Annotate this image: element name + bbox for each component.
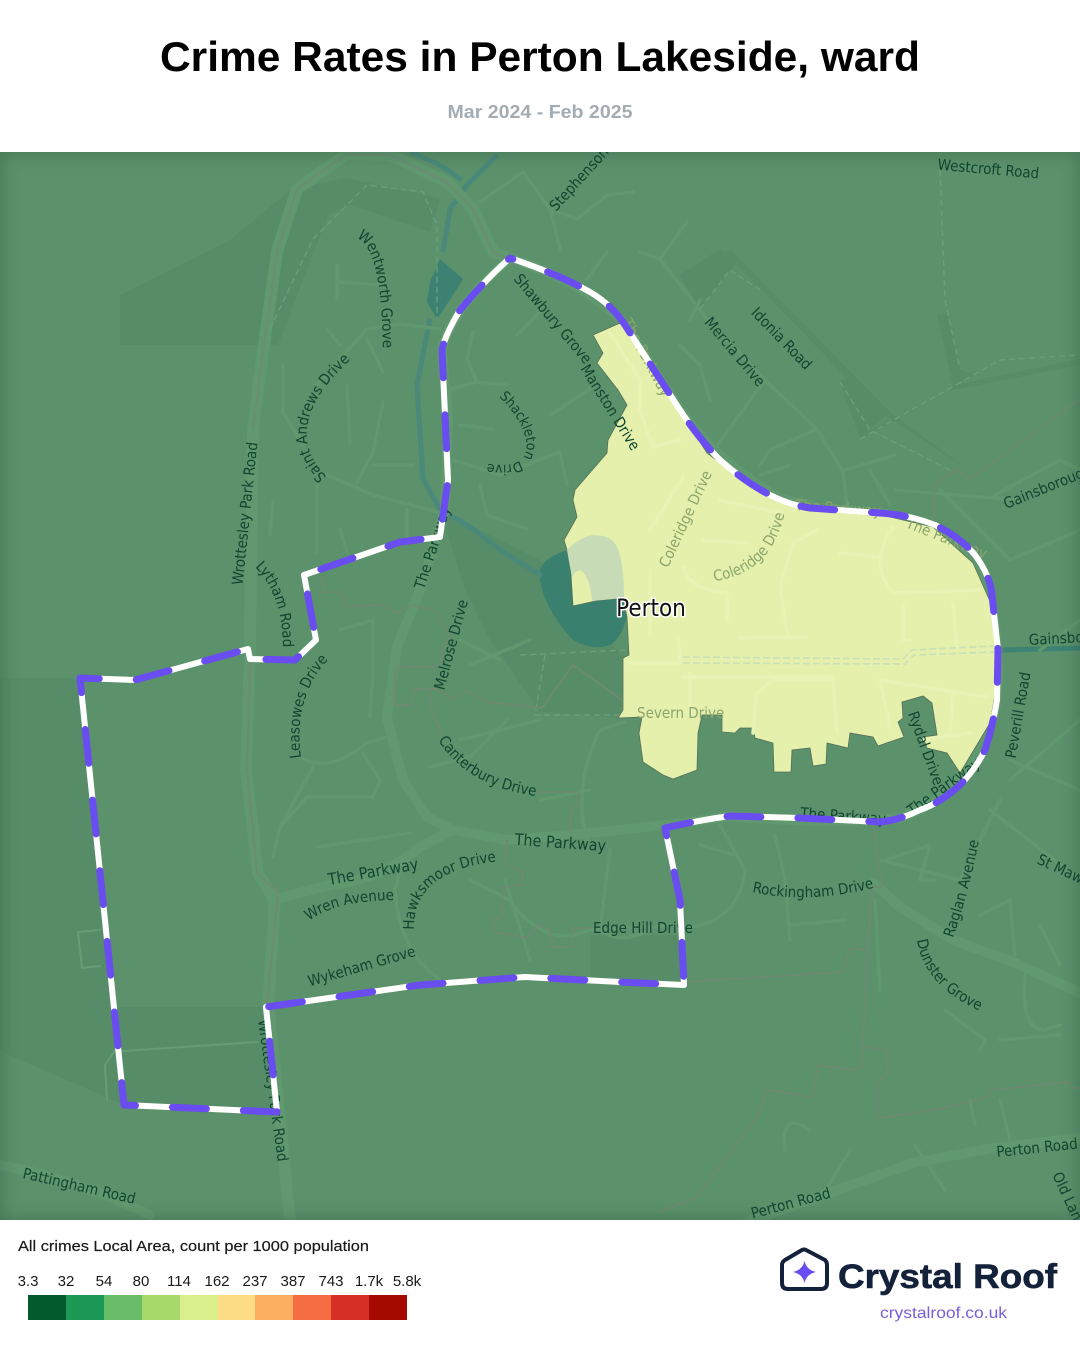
street labels: Perton Road [996,1135,1079,1161]
street labels: Wrottesley Park Road [229,441,261,586]
footpath dashed lines [683,646,995,664]
legend scale values: 162 [204,1273,230,1290]
local boundary lines [247,154,1080,1212]
street labels: The Parkway [618,315,675,400]
map background [0,152,1080,1220]
boundary: Perton Lakeside ward outline [80,258,998,1112]
place label: Perton: Perton [616,594,686,622]
street labels: Wentworth Grove [359,228,393,348]
legend scale values: 237 [242,1273,268,1290]
legend scale values: 54 [96,1273,112,1290]
legend scale values: 1.7k [355,1273,384,1290]
street labels: The Parkway [794,496,882,520]
legend scale values: 3.3 [18,1273,38,1290]
legend scale values: 114 [167,1273,191,1290]
street labels: Edge Hill Drive [593,919,693,937]
legend scale values: 5.8k [393,1273,422,1290]
legend colour ramp [28,1295,407,1320]
street labels: Coleridge Drive [655,468,716,570]
street labels: Pattingham Road [21,1164,137,1208]
street labels: Wykeham Grove [306,942,418,990]
street labels: Lytham Road [256,560,294,646]
roads [77,185,1048,1108]
street labels: Rydal Drive [904,709,947,788]
website url: crystalroof.co.uk [880,1305,1008,1322]
street labels: Westcroft Road [937,156,1040,182]
street labels: Wren Avenue [303,892,394,919]
street labels: Dunster Grove [917,939,981,1010]
street labels: Hawksmoor Drive [402,853,496,928]
street labels: The Parkway [903,514,990,563]
subtitle: date range: Mar 2024 - Feb 2025 [448,102,632,122]
legend scale values [18,1273,422,1290]
street labels: Shackleton Drive [488,391,536,476]
legend scale values: 80 [133,1273,149,1290]
street labels: Peverill Road [1002,671,1034,760]
street labels: Rockingham Drive [753,880,873,900]
highlighted area: crime rate zone [564,323,1000,779]
street labels: Idonia Road [748,304,816,373]
street labels: Severn Drive [637,704,724,722]
street labels: Coleridge Drive [714,513,784,580]
legend scale values: 387 [280,1273,306,1290]
water: lakes and stream [410,152,1080,650]
legend title: All crimes Local Area, count per 1000 population [18,1238,369,1255]
street labels: Perton Road [749,1184,832,1222]
street labels: Mercia Drive [701,313,769,390]
street labels: Melrose Drive [430,598,472,692]
logo: Crystal Roof [782,1250,1058,1322]
street labels: Stephenson [546,143,613,215]
street labels [23,152,1080,1220]
street labels: Wrottesley Park Road [254,1018,292,1163]
street labels: Manston Drive [577,361,644,454]
street labels: The Parkway [903,754,984,820]
street labels: The Parkway [513,830,607,855]
street labels: Saint Andrews Drive [296,356,350,482]
icon: house with star [782,1250,827,1289]
title: Crime Rates in Perton Lakeside, ward [160,33,920,80]
street labels: The Parkway [325,854,420,889]
legend scale values: 32 [58,1273,74,1290]
wordmark: Crystal Roof [838,1258,1058,1296]
street labels: Canterbury Drive [440,736,536,796]
street labels: The Parkway [799,804,887,828]
street labels: Raglan Avenue [943,840,978,937]
street labels: The Parkway [410,504,454,592]
footpaths [270,170,1080,715]
pale park patch [567,535,624,601]
street labels: Leasowes Drive [290,656,328,758]
land-use shading [0,178,1080,1112]
street labels: Shawbury Grove [510,270,596,367]
legend [18,1238,422,1320]
roads in highlighted area [610,333,987,740]
legend scale values: 743 [318,1273,344,1290]
